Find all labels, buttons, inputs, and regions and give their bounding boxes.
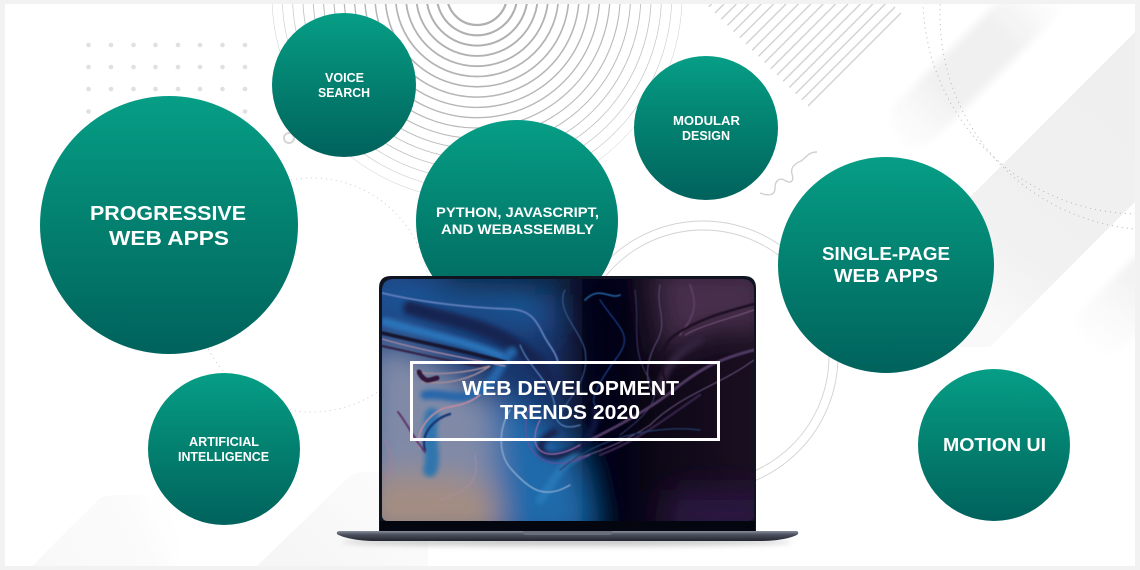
diagonal stripes bbox=[709, 4, 901, 106]
laptop screen wallpaper bbox=[382, 279, 754, 521]
circle: artificial intelligence bbox=[148, 373, 300, 525]
laptop shadow bbox=[342, 538, 792, 546]
laptop bottom bezel bbox=[380, 521, 755, 533]
laptop lid bbox=[379, 276, 756, 533]
circle: progressive web apps: PROGRESSIVE bbox=[90, 203, 246, 225]
circle: motion ui bbox=[918, 369, 1070, 521]
wallpaper: haze bbox=[382, 279, 582, 521]
wallpaper: fine swirls bbox=[382, 285, 754, 500]
diagonal band: bottom left bbox=[32, 495, 178, 566]
diagonal band: right large bbox=[970, 32, 1135, 320]
circle: artificial intelligence: ARTIFICIAL bbox=[189, 435, 259, 449]
circle: modular design: MODULAR bbox=[673, 114, 740, 128]
circle: modular design bbox=[634, 56, 778, 200]
title box: WEB DEVELOPMENT bbox=[462, 378, 679, 400]
dotted ring: left bbox=[195, 178, 429, 412]
diagonal band: lower right bbox=[1111, 260, 1135, 308]
squiggle bbox=[760, 152, 817, 195]
laptop notch bbox=[523, 531, 612, 535]
title box: TRENDS 2020 bbox=[500, 402, 640, 424]
circle: python, javascript, webassembly: AND WEBASSEMBLY bbox=[441, 221, 595, 237]
circle: modular design: DESIGN bbox=[682, 129, 730, 143]
diagonal band: top right bbox=[913, 4, 1035, 124]
circle: progressive web apps bbox=[40, 96, 298, 354]
laptop base bbox=[337, 531, 798, 541]
circle: single-page web apps: SINGLE-PAGE bbox=[822, 244, 950, 264]
circle: voice search bbox=[272, 13, 416, 157]
circle: voice search: SEARCH bbox=[318, 86, 370, 100]
small ring bbox=[284, 133, 294, 143]
circle: single-page web apps bbox=[778, 157, 994, 373]
circle: python, javascript, webassembly bbox=[416, 120, 618, 322]
dot grid bbox=[86, 43, 247, 114]
circle: motion ui: MOTION UI bbox=[943, 435, 1046, 455]
circle: artificial intelligence: INTELLIGENCE bbox=[178, 450, 269, 464]
concentric arcs bbox=[272, 0, 682, 200]
laptop bbox=[337, 265, 798, 546]
diagonal band: bottom centre bbox=[258, 530, 328, 566]
wallpaper: colour fields bbox=[382, 279, 754, 521]
thin rings behind laptop bbox=[605, 220, 838, 480]
circle: python, javascript, webassembly: PYTHON, JAVASCRIPT, bbox=[436, 204, 599, 220]
title box bbox=[412, 362, 718, 440]
wallpaper: broad swirls bbox=[385, 308, 700, 500]
circle: voice search: VOICE bbox=[325, 71, 364, 85]
dotted rings: right bbox=[923, 0, 1140, 230]
circle: single-page web apps: WEB APPS bbox=[834, 266, 938, 286]
circle: progressive web apps: WEB APPS bbox=[109, 228, 229, 250]
